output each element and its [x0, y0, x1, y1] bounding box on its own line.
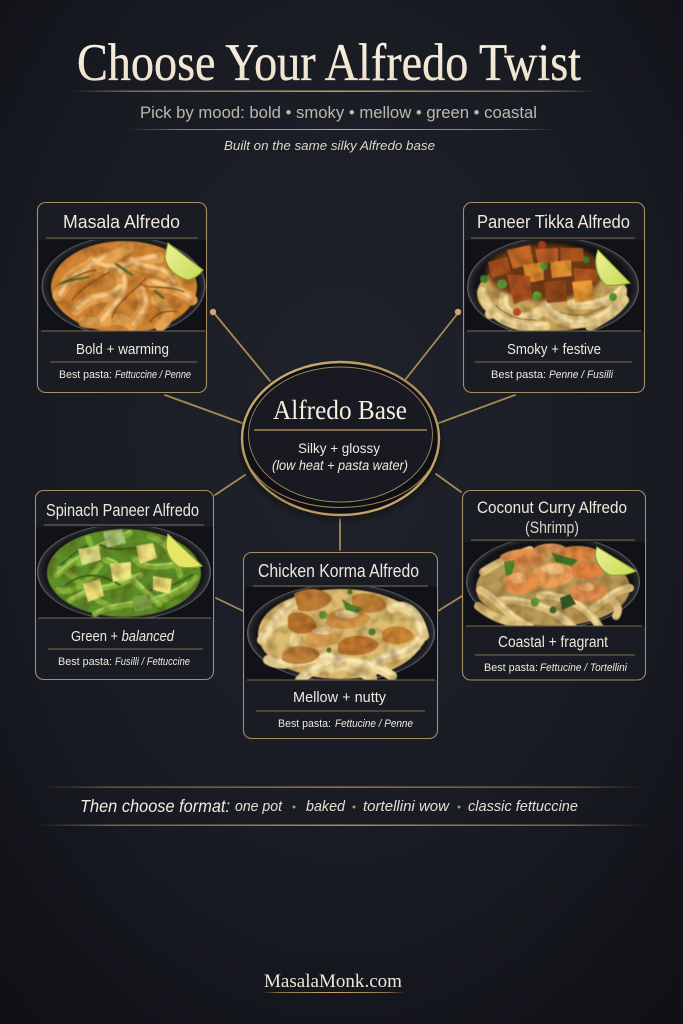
best pasta: Penne / Fusilli: [549, 369, 614, 381]
subtitle: moods: Pick by mood: bold • smoky • mellow • green • coastal: [140, 104, 537, 122]
panel: Masala Alfredo: [38, 202, 206, 392]
heading: (Shrimp): [525, 518, 579, 537]
best pasta: Fusilli / Fettuccine: [115, 656, 190, 668]
dish photo: coconut curry shrimp: [464, 542, 645, 626]
format options: baked: [306, 799, 346, 815]
descriptor: Bold + warming: [76, 341, 169, 358]
format options: tortellini wow: [363, 799, 451, 815]
dish photo: chicken korma: [245, 584, 437, 682]
dish photo: spinach paneer: [36, 524, 213, 620]
central node: Alfredo Base: [240, 362, 442, 520]
heading: Spinach Paneer Alfredo: [46, 500, 199, 520]
heading: Masala Alfredo: [63, 212, 180, 232]
dish photo: masala: [39, 236, 206, 336]
tagline: Built on the same silky Alfredo base: [224, 139, 435, 153]
dish photo: paneer tikka: [465, 237, 644, 337]
best pasta: Fettucine / Tortellini: [540, 662, 627, 674]
descriptor: Green + balanced: [71, 628, 175, 645]
best pasta: Best pasta:: [278, 718, 331, 730]
node text: Silky + glossy: [298, 441, 380, 456]
best pasta: Best pasta:: [58, 656, 112, 668]
panel: Chicken Korma Alfredo: [244, 552, 438, 738]
heading: Coconut Curry Alfredo: [477, 498, 627, 517]
panel: Paneer Tikka Alfredo: [464, 202, 644, 392]
format label: Then choose format:: [80, 796, 230, 816]
format options: classic fettuccine: [468, 799, 578, 815]
descriptor: Coastal + fragrant: [498, 634, 609, 651]
best pasta: Best pasta:: [484, 662, 538, 674]
heading: Chicken Korma Alfredo: [258, 561, 419, 581]
node heading: Alfredo Base: [273, 395, 407, 425]
title block: [71, 34, 599, 153]
heading: Paneer Tikka Alfredo: [477, 212, 630, 232]
best pasta: Fettucine / Penne: [335, 718, 413, 730]
panel: Coconut Curry Alfredo (Shrimp): [462, 490, 646, 680]
panel: Spinach Paneer Alfredo: [36, 490, 214, 680]
connector lines: [165, 309, 515, 611]
footer: brand: MasalaMonk.com: [264, 971, 402, 992]
best pasta: Fettuccine / Penne: [115, 369, 191, 381]
best pasta: Best pasta:: [491, 369, 546, 381]
descriptor: Mellow + nutty: [293, 689, 386, 706]
title: Choose Your Alfredo Twist: [77, 34, 581, 92]
central node: Alfredo Base: (low heat + pasta water): [272, 458, 408, 473]
format strip: [36, 787, 648, 826]
format options: one pot: [235, 799, 283, 815]
descriptor: Smoky + festive: [507, 341, 601, 358]
best pasta: Best pasta:: [59, 369, 112, 381]
